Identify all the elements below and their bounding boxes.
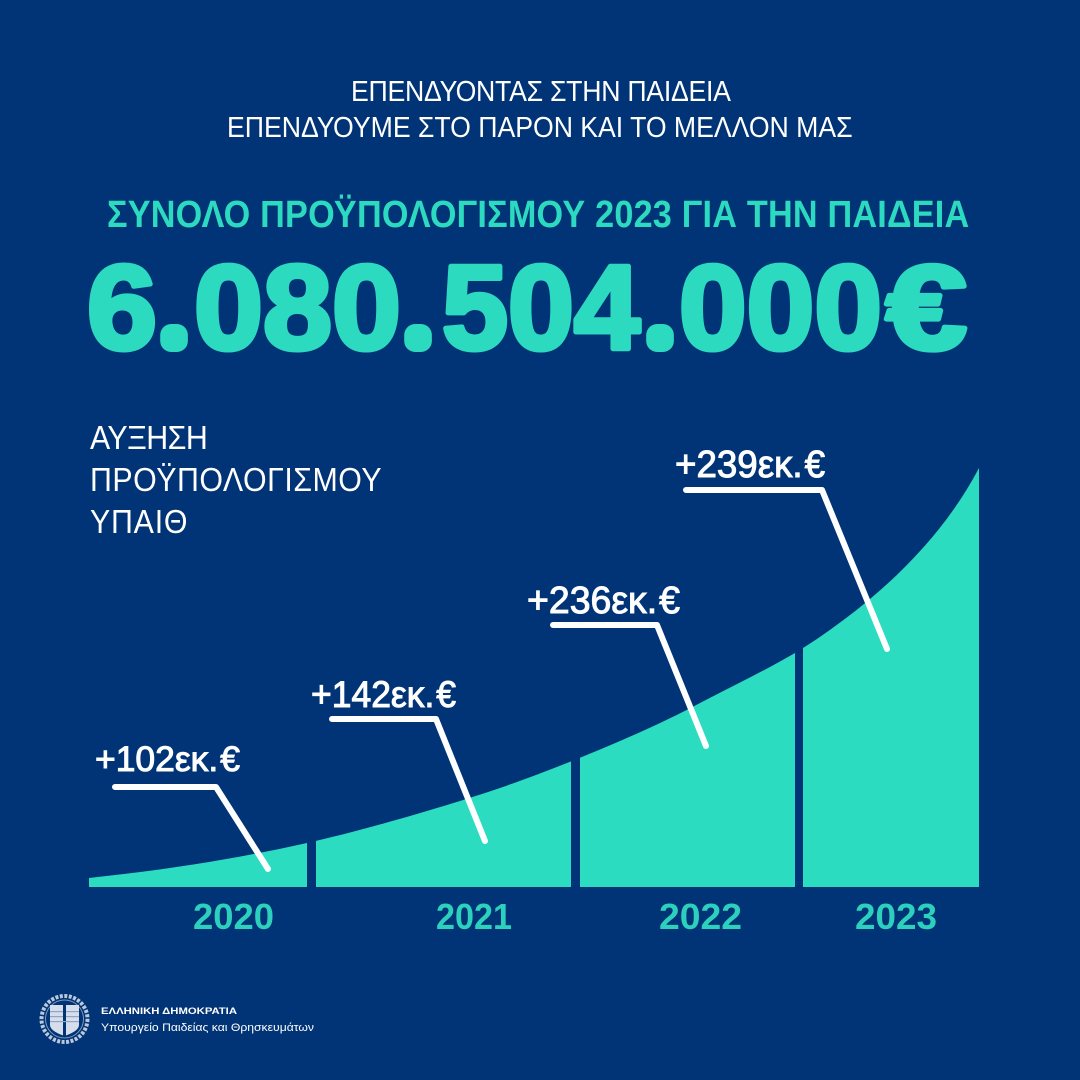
area chart	[89, 468, 979, 890]
total amount: 504	[442, 241, 640, 375]
callout: 2021	[311, 674, 485, 841]
title: ΕΠΕΝΔΥΟΥΜΕ ΣΤΟ ΠΑΡΟΝ ΚΑΙ ΤΟ ΜΕΛΛΟΝ ΜΑΣ	[227, 111, 853, 143]
heading: total budget: ΣΥΝΟΛΟ ΠΡΟΫΠΟΛΟΓΙΣΜΟΥ 2023 ΓΙΑ ΤΗΝ ΠΑΙΔΕΙΑ	[107, 192, 969, 235]
callout: 2020: +102εκ.€	[95, 740, 240, 779]
chart subtitle: ΑΥΞΗΣΗ	[90, 419, 208, 456]
chart subtitle	[90, 419, 382, 540]
year labels: 2023	[855, 896, 937, 937]
callout: 2023: +239εκ.€	[675, 444, 825, 486]
total amount: 6	[87, 241, 157, 375]
ministry name: Υπουργείο Παιδείας και Θρησκευμάτων	[101, 1022, 315, 1034]
year labels	[193, 896, 937, 937]
ministry name: ΕΛΛΗΝΙΚΗ ΔΗΜΟΚΡΑΤΙΑ	[101, 1006, 237, 1017]
total amount: .	[412, 306, 424, 350]
chart subtitle: ΠΡΟΫΠΟΛΟΓΙΣΜΟΥ	[90, 461, 382, 498]
title	[227, 75, 853, 143]
chart subtitle: ΥΠΑΙΘ	[90, 503, 188, 540]
callout: 2022: +236εκ.€	[527, 580, 680, 622]
callout: 2020	[95, 740, 268, 869]
total amount: .	[654, 306, 666, 350]
title: ΕΠΕΝΔΥΟΝΤΑΣ ΣΤΗΝ ΠΑΙΔΕΙΑ	[351, 75, 731, 107]
total amount: 080	[194, 241, 401, 375]
year labels: 2021	[436, 896, 512, 937]
total amount	[87, 241, 967, 375]
total amount: 000	[679, 241, 882, 375]
callout: 2022	[527, 580, 706, 746]
year labels: 2022	[659, 896, 742, 937]
callout: 2023	[675, 444, 887, 649]
ministry name	[101, 1006, 315, 1034]
callout: 2021: +142εκ.€	[311, 674, 456, 715]
icon: Greek coat of arms	[42, 996, 88, 1042]
total amount: .	[168, 306, 180, 350]
total amount: €	[886, 241, 967, 375]
year labels: 2020	[193, 896, 274, 937]
